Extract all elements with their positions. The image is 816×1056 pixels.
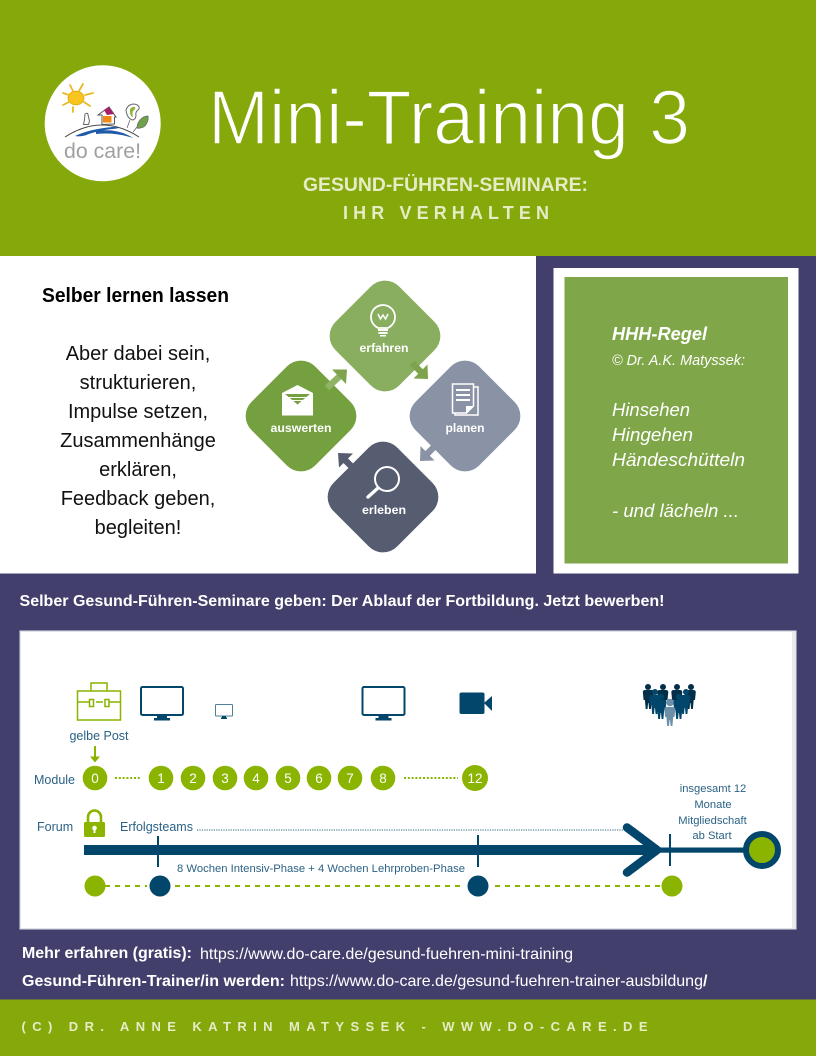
- house: [98, 107, 116, 124]
- module circles: [83, 765, 488, 791]
- module circles: 7: [346, 771, 354, 786]
- icon: lock: [84, 811, 105, 837]
- panel: timeline: [20, 630, 796, 930]
- title: Mini-Training 3: [208, 75, 690, 161]
- module circles: 1: [157, 771, 165, 786]
- walker: [84, 113, 90, 124]
- body text: Feedback geben,: [61, 488, 215, 510]
- trees: [126, 104, 139, 120]
- subtitle line 1: GESUND-FÜHREN-SEMINARE:: [303, 175, 588, 196]
- module circles: 12: [467, 771, 483, 786]
- hill: [65, 125, 139, 137]
- label: Forum: Forum: [37, 820, 73, 834]
- arrow: planen to erleben: [420, 442, 439, 461]
- body text: Aber dabei sein,: [66, 343, 210, 365]
- body text: Impulse setzen,: [68, 401, 208, 423]
- rule list: Hinsehen: [612, 400, 690, 420]
- footer text: (C) DR. ANNE KATRIN MATYSSEK - WWW.DO-CARE.DE: [22, 1019, 648, 1034]
- module circles: 6: [315, 771, 323, 786]
- link line 1: Mehr erfahren (gratis):: [22, 945, 192, 962]
- diamond: erleben: erleben: [362, 503, 406, 517]
- body text: Zusammenhänge: [60, 430, 216, 452]
- logo: do care: [45, 65, 161, 181]
- arrow: erfahren to planen: [412, 363, 428, 379]
- note: membership: Mitgliedschaft: [678, 815, 748, 827]
- icon: monitor 2: [362, 687, 404, 720]
- rule list: Hingehen: [612, 425, 693, 445]
- rule list: - und lächeln ...: [612, 501, 739, 521]
- note: membership: [678, 783, 748, 842]
- section heading: Selber Gesund-Führen-Seminare geben: Der Ablauf der Fortbildung. Jetzt bewerben!: [20, 593, 664, 610]
- note: membership: insgesamt 12: [680, 783, 746, 795]
- link line 1: [22, 945, 573, 963]
- panel heading: Selber lernen lassen: [42, 285, 229, 307]
- label: phase: 8 Wochen Intensiv-Phase + 4 Wochen Lehrproben-Phase: [177, 863, 465, 875]
- note: membership: Monate: [694, 799, 732, 811]
- diamond: auswerten: auswerten: [270, 421, 332, 435]
- module circles: 2: [189, 771, 197, 786]
- icon: small monitor: [216, 704, 232, 719]
- dotted teams line: [197, 829, 623, 831]
- rule list: [612, 400, 745, 521]
- timeline arrow: [84, 828, 748, 872]
- logo wordmark: do care!: [64, 140, 141, 163]
- module circles: 8: [379, 771, 387, 786]
- diagram: learning cycle: [237, 272, 529, 561]
- label: Module: Module: [34, 773, 75, 787]
- subtitle line 2: IHR VERHALTEN: [343, 203, 549, 223]
- diamond: planen: planen: [446, 421, 484, 435]
- copyright line: © Dr. A.K. Matyssek:: [612, 353, 745, 369]
- icon: briefcase: [78, 683, 120, 720]
- label: Erfolgsteams: Erfolgsteams: [120, 820, 193, 834]
- arrow: auswerten to erfahren: [327, 370, 347, 388]
- icon: people group: [643, 684, 696, 726]
- body text: begleiten!: [95, 517, 181, 539]
- diamond: erfahren: [321, 272, 449, 400]
- links block: [22, 945, 708, 990]
- module circles: 4: [252, 771, 260, 786]
- rule list: Händeschütteln: [612, 450, 745, 470]
- module circles: 5: [284, 771, 292, 786]
- diamond: auswerten: [237, 352, 365, 480]
- HHH heading: HHH-Regel: [612, 324, 708, 344]
- arrow: erleben to auswerten: [338, 453, 357, 472]
- panel: HHH-Regel: [554, 268, 798, 574]
- link line 1: https://www.do-care.de/gesund-fuehren-mini-training: [200, 946, 573, 963]
- diamond: planen: [401, 352, 529, 480]
- body text: [60, 343, 216, 539]
- body text: strukturieren,: [80, 372, 196, 394]
- milestones: [84, 873, 682, 899]
- header band: [0, 0, 816, 256]
- diamond: erfahren: erfahren: [360, 341, 408, 355]
- icon: monitor 1: [141, 687, 183, 720]
- icon: video camera: [460, 692, 492, 714]
- link line 2: /: [703, 973, 708, 990]
- module circles: 0: [91, 771, 99, 786]
- diamond: erleben: [319, 433, 447, 561]
- link line 2: https://www.do-care.de/gesund-fuehren-trainer-ausbildung: [290, 973, 703, 990]
- link line 2: [22, 973, 708, 990]
- body text: erklären,: [99, 459, 177, 481]
- label: gelbe Post: gelbe Post: [69, 729, 129, 743]
- panel: selber lernen lassen: [0, 256, 536, 574]
- link line 2: Gesund-Führen-Trainer/in werden:: [22, 973, 285, 990]
- footer band: [0, 1000, 816, 1056]
- note: membership: ab Start: [692, 830, 732, 842]
- module circles: 3: [221, 771, 229, 786]
- end marker: [746, 834, 778, 866]
- arrow: post to module 0: [90, 746, 100, 762]
